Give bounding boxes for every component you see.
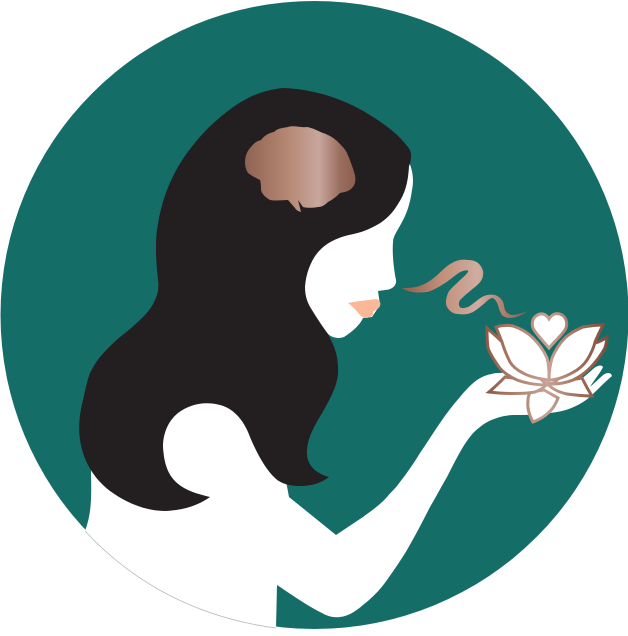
right big petal: [549, 325, 603, 380]
left back petal: [487, 328, 547, 385]
heart: [532, 314, 567, 348]
bottom petal: [528, 390, 558, 422]
lower left petal: [489, 377, 548, 394]
brain: [245, 126, 355, 212]
black hair: [79, 88, 411, 511]
right back petal: [553, 337, 607, 384]
white face: [300, 160, 413, 338]
scent wisp: [402, 260, 528, 318]
lips: [348, 299, 380, 318]
lower right petal: [548, 378, 592, 396]
lotus flower: [487, 314, 607, 422]
left big petal: [496, 325, 549, 380]
white body and arm silhouette: [85, 366, 612, 628]
faint edge line of the body: [85, 531, 276, 628]
